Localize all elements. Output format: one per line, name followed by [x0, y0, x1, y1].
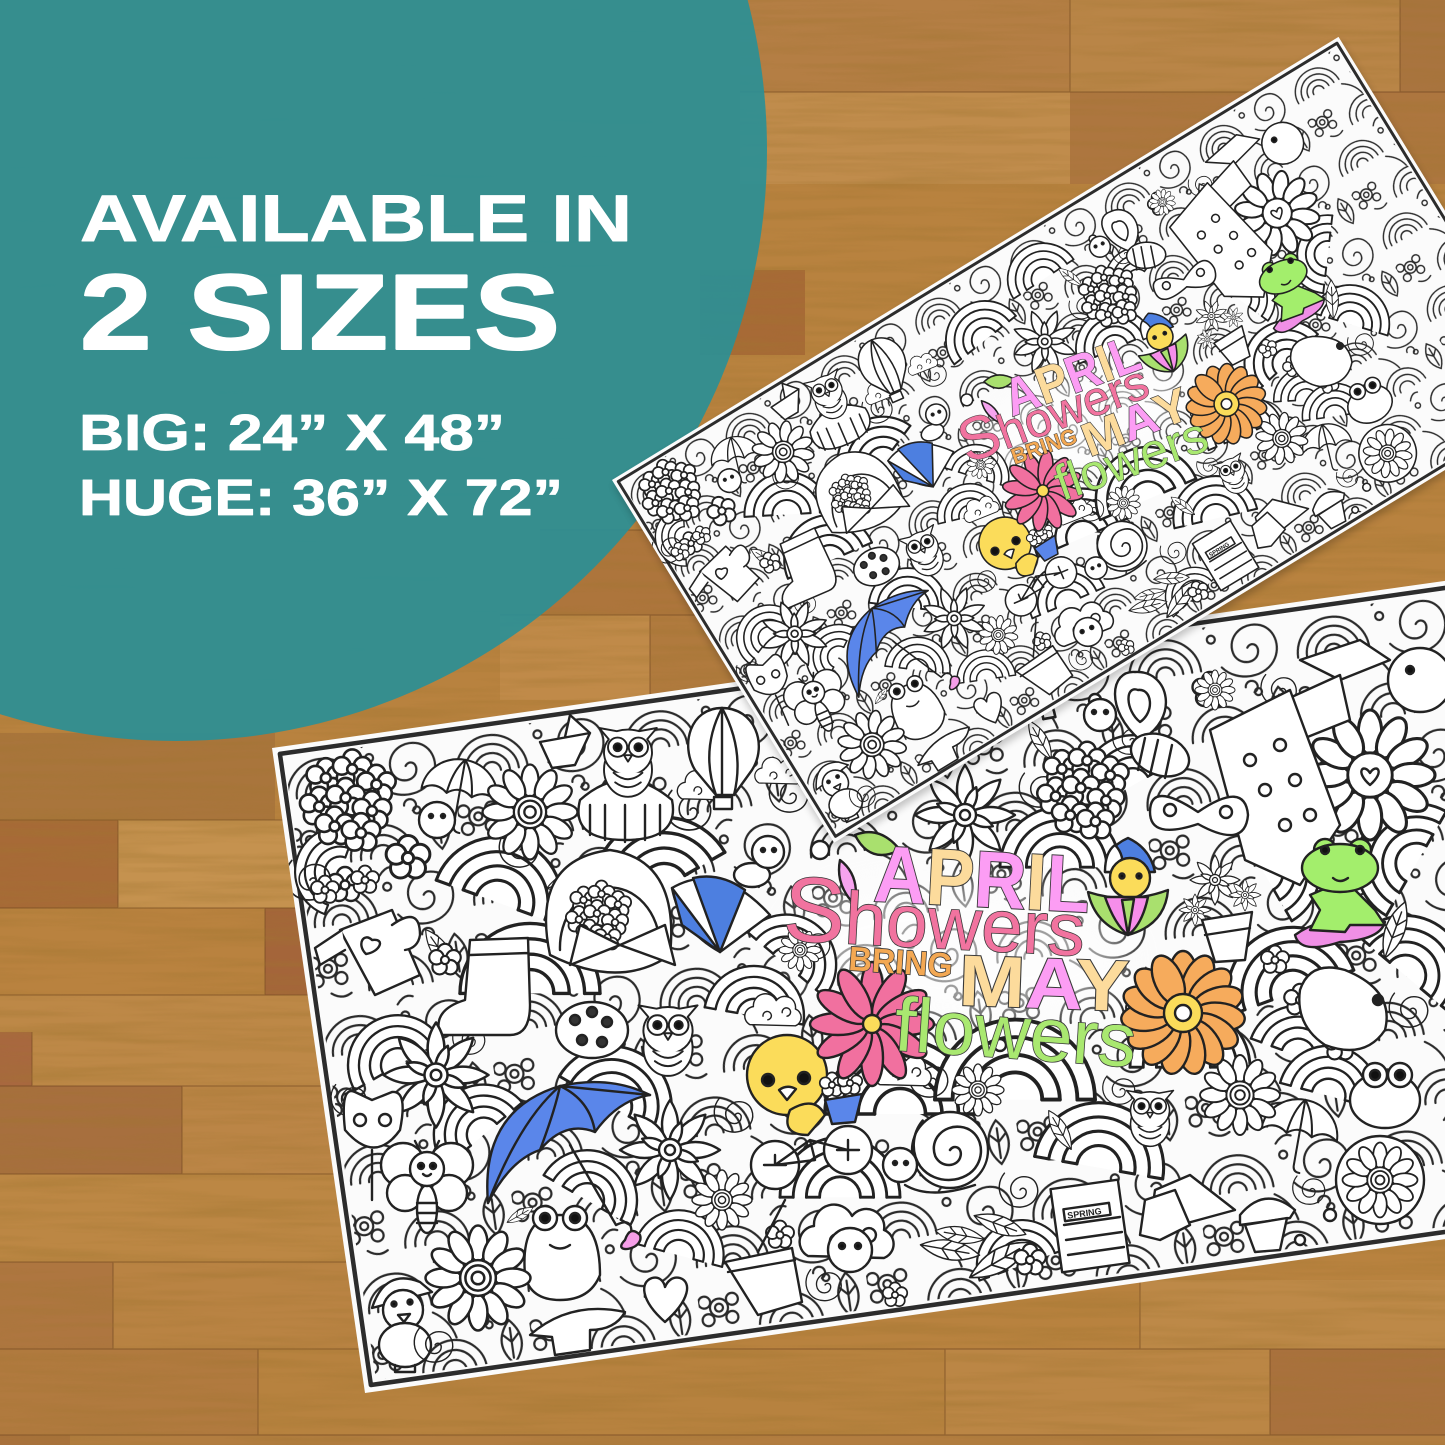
tulip	[344, 1091, 403, 1200]
dragonfly	[1285, 640, 1445, 740]
small umbrella with chick	[415, 753, 503, 838]
flower below title	[952, 1064, 1004, 1116]
hydrangea centre	[1037, 742, 1129, 838]
blue and white umbrella	[672, 876, 770, 952]
shadow of small poster	[614, 41, 1445, 848]
lily pad	[1295, 918, 1385, 947]
bee	[734, 836, 784, 887]
MAY: MAY	[957, 941, 1130, 1027]
bicycle	[751, 1126, 872, 1189]
poster: big 24 x 48	[565, 13, 1445, 867]
patterned butterfly	[1150, 796, 1248, 835]
polka dot boot	[1210, 690, 1340, 885]
star flower left	[384, 1022, 488, 1128]
heart winged butterfly	[1084, 672, 1166, 740]
flower top right	[1195, 670, 1235, 710]
size line: big: BIG: 24” X 48”	[79, 404, 505, 461]
Showers: Showers	[781, 858, 1088, 976]
small flower	[692, 1170, 752, 1230]
calendar: SPRING	[1067, 1206, 1102, 1221]
sneakers	[1140, 1175, 1235, 1240]
blue umbrella	[487, 1082, 650, 1249]
flower left of title	[779, 929, 821, 971]
small poster title text: Showers	[949, 345, 1157, 476]
calendar	[1050, 1180, 1130, 1272]
small owl right	[1127, 1090, 1173, 1146]
flower pot	[1179, 855, 1261, 962]
blue flower pot	[820, 1070, 862, 1124]
round flower	[1336, 1136, 1424, 1224]
outline umbrella	[1255, 1093, 1343, 1178]
small poster title text: BRING	[1008, 423, 1080, 469]
flower right	[1200, 1055, 1280, 1135]
owl	[638, 1005, 698, 1076]
paper boat	[540, 715, 590, 768]
frog outline	[1350, 1063, 1420, 1128]
small poster title text: APRIL	[996, 325, 1148, 428]
sheep	[800, 1205, 894, 1272]
orange flower	[1120, 951, 1246, 1077]
daisy	[482, 764, 578, 860]
teal circle panel	[0, 0, 767, 741]
green frog	[1302, 839, 1385, 932]
frog with glasses	[524, 1206, 600, 1300]
bird	[1299, 968, 1387, 1050]
chick in striped umbrella	[1088, 838, 1168, 935]
cup	[725, 1200, 802, 1315]
leaves	[934, 1207, 1029, 1247]
poster title text	[781, 829, 1139, 1084]
rain boot	[438, 938, 530, 1035]
ladybug	[556, 1002, 628, 1058]
hot air balloon	[688, 708, 759, 809]
heart	[644, 1278, 687, 1322]
duck in hat	[372, 1278, 453, 1372]
watering can with flowers	[311, 866, 420, 995]
swirl filler doodles	[282, 663, 1445, 1325]
small poster title text	[938, 306, 1218, 550]
heading: 2 sizes: 2 SIZES	[80, 252, 560, 372]
snail	[883, 1112, 988, 1192]
heading: available in: AVAILABLE IN	[80, 181, 632, 255]
sunflower circle	[1305, 710, 1435, 840]
poster: big 36 x 72	[272, 564, 1445, 1393]
striped bee	[1125, 726, 1195, 784]
pink leaves	[839, 832, 900, 905]
yellow chick	[747, 1035, 827, 1135]
poster doodle artwork	[280, 572, 1445, 1385]
mushroom	[530, 1309, 625, 1355]
size line: huge: HUGE: 36” X 72”	[79, 469, 563, 526]
flower basket	[546, 850, 675, 972]
hydrangea cluster	[300, 749, 396, 851]
BRING: BRING	[847, 940, 954, 985]
cupcake	[1240, 1199, 1295, 1252]
owl on tutu	[578, 728, 673, 842]
APRIL: APRIL	[872, 829, 1092, 929]
butterfly bug	[381, 1141, 473, 1233]
flowers: flowers	[892, 982, 1139, 1084]
star flower centre	[620, 1100, 720, 1200]
star flower top	[915, 765, 1015, 865]
pink flower	[810, 962, 934, 1086]
five petal flower	[386, 836, 430, 878]
small poster title text: MAY	[1074, 377, 1197, 467]
daisy bottom left	[426, 1226, 530, 1330]
small poster title text: flowers	[1047, 406, 1215, 511]
